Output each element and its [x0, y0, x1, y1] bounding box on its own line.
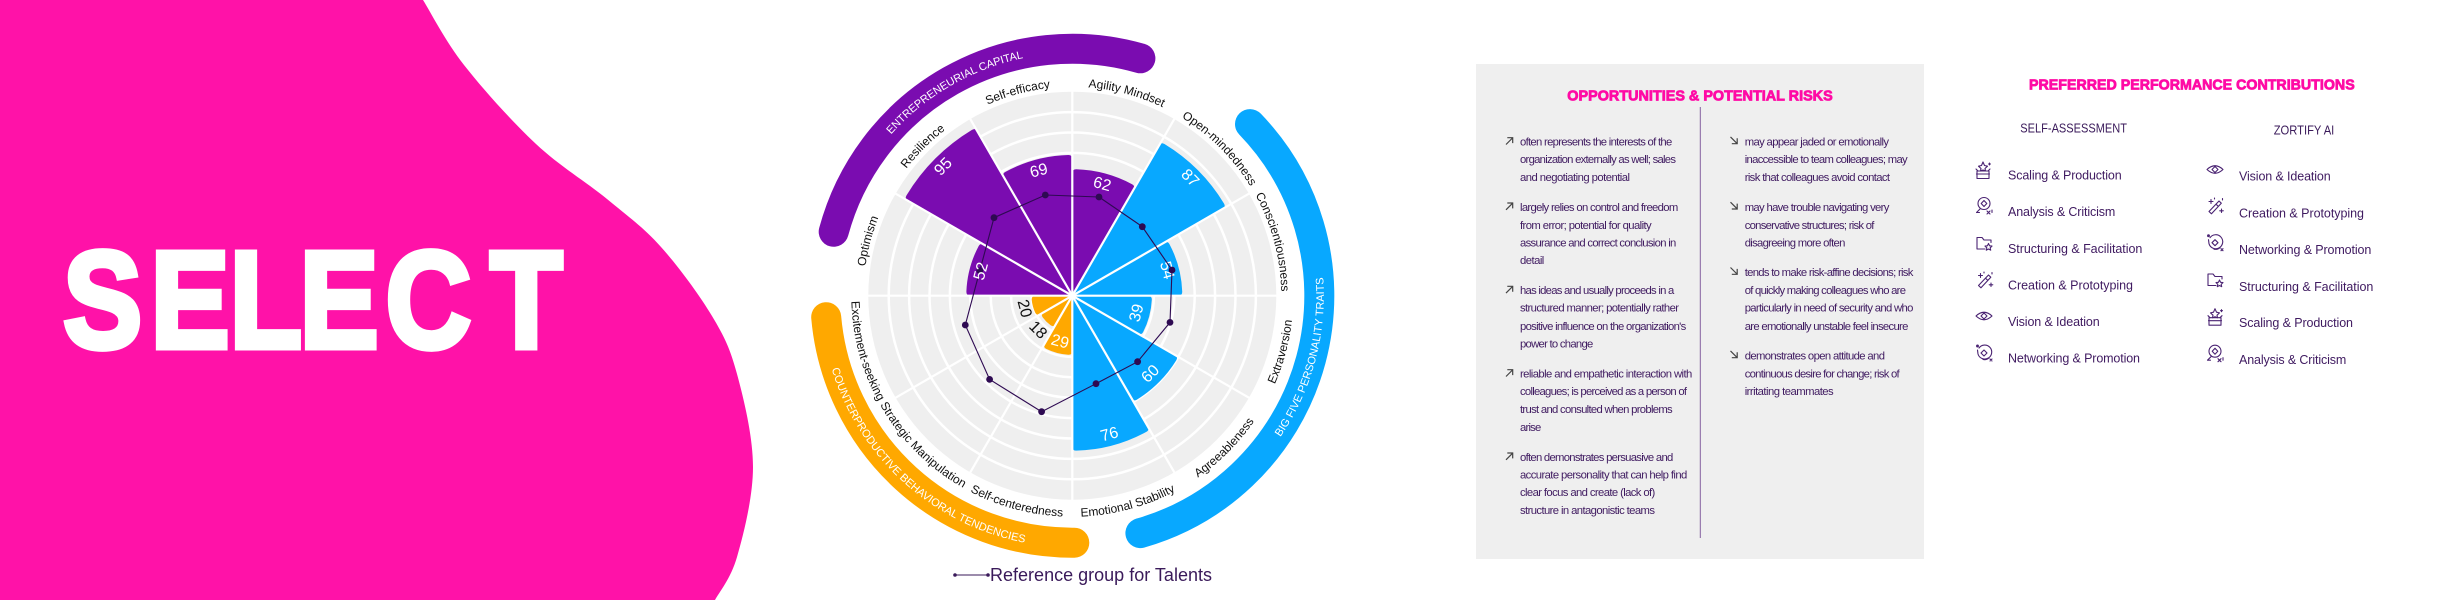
risk 2: conservative structures; risk of	[1745, 220, 1875, 232]
category labels: Agility Mindset	[1088, 80, 1166, 108]
item: networking and promotion: Networking & Promotion	[2008, 352, 2140, 366]
title: SELECT: SELECT	[63, 223, 563, 378]
opportunity 5	[1506, 452, 1687, 517]
item: structuring and facilitation	[2208, 274, 2373, 294]
value labels: 39	[1127, 302, 1148, 324]
risk 3: particularly in need of security and who	[1745, 302, 1913, 314]
value labels: 87	[1177, 166, 1202, 191]
bars	[904, 116, 1237, 468]
item: networking and promotion	[1977, 345, 2140, 366]
opportunity 5: clear focus and create (lack of)	[1520, 487, 1656, 499]
category labels: Resilience	[900, 126, 944, 168]
item: structuring and facilitation	[1977, 238, 2142, 256]
item: scaling and production: Scaling & Production	[2008, 168, 2122, 182]
item: networking and promotion: Networking & Promotion	[2239, 243, 2371, 257]
risk 1: inaccessible to team colleagues; may	[1745, 154, 1908, 166]
opportunity 3: power to change	[1520, 338, 1593, 350]
item: creation and prototyping	[2209, 198, 2364, 220]
opportunity 4: colleagues; is perceived as a person of	[1520, 386, 1688, 398]
item: creation and prototyping: Creation & Prototyping	[2008, 278, 2133, 292]
opportunity 4: reliable and empathetic interaction with	[1520, 368, 1692, 380]
opportunity 5: structure in antagonistic teams	[1520, 505, 1655, 517]
band: big five personality traits	[1125, 109, 1334, 548]
chart grid	[868, 92, 1276, 500]
opportunity 1: organization externally as well; sales	[1520, 154, 1676, 166]
opportunity 5: often demonstrates persuasive and	[1520, 452, 1673, 464]
risk 4: demonstrates open attitude and	[1745, 350, 1885, 362]
opportunity 2: assurance and correct conclusion in	[1520, 238, 1676, 250]
pink background shape	[0, 0, 753, 600]
item: vision and ideation: Vision & Ideation	[2008, 315, 2100, 329]
value labels	[931, 155, 1202, 445]
panel: opportunities and potential risks	[1476, 64, 1924, 559]
item: vision and ideation	[1976, 312, 2100, 329]
risk 2	[1730, 202, 1890, 250]
opportunity 4	[1506, 368, 1692, 434]
column heading: ZORTIFY AI	[2274, 123, 2334, 138]
column heading: SELF-ASSESSMENT	[2020, 121, 2127, 136]
opportunity 3: positive influence on the organization's	[1520, 321, 1687, 333]
reference group line	[962, 192, 1175, 415]
risk 2: disagreeing more often	[1745, 238, 1845, 250]
category labels: Extraversion	[1268, 320, 1292, 384]
risk 3: of quickly making colleagues who are	[1745, 285, 1906, 297]
column divider	[1699, 107, 1701, 538]
item: creation and prototyping	[1978, 272, 2133, 292]
opportunity 1	[1506, 136, 1676, 184]
value labels: 20	[1013, 298, 1035, 320]
category labels: Optimism	[858, 216, 878, 266]
category labels: Strategic Manipulation	[881, 402, 966, 488]
category labels: Emotional Stability	[1081, 486, 1174, 517]
item: networking and promotion	[2208, 235, 2371, 257]
category labels: Conscientiousness	[1256, 192, 1288, 291]
value labels: 62	[1091, 174, 1113, 195]
value labels: 69	[1028, 161, 1050, 182]
value labels: 29	[1049, 332, 1071, 353]
value 52: 52	[971, 260, 992, 282]
item: structuring and facilitation: Structuring & Facilitation	[2008, 242, 2142, 256]
item: vision and ideation: Vision & Ideation	[2239, 170, 2331, 184]
risk 4: irritating teammates	[1745, 386, 1834, 398]
opportunity 2: largely relies on control and freedom	[1520, 202, 1678, 214]
category labels: Self-centeredness	[971, 485, 1063, 516]
value labels: 60	[1138, 362, 1163, 386]
risk 4: continuous desire for change; risk of	[1745, 368, 1901, 380]
band: entrepreneurial capital: ENTREPRENEURIAL CAPITAL	[886, 52, 1023, 134]
opportunity 5: accurate personality that can help find	[1520, 470, 1687, 482]
value labels: 95	[931, 155, 956, 179]
item: scaling and production: Scaling & Production	[2239, 316, 2353, 330]
opportunity 2: from error; potential for quality	[1520, 220, 1652, 232]
category labels: Open-mindedness	[1184, 112, 1255, 186]
column: zortify ai	[2207, 123, 2373, 367]
opportunity 3: has ideas and usually proceeds in a	[1520, 285, 1675, 297]
value labels: 18	[1025, 318, 1050, 343]
opportunity 1: often represents the interests of the	[1520, 136, 1672, 148]
value labels: 54	[1156, 260, 1177, 281]
item: analysis and criticism: Analysis & Criticism	[2239, 353, 2346, 367]
opportunity 3: structured manner; potentially rather	[1520, 302, 1679, 314]
legend: reference group for talents: Reference group for Talents	[990, 565, 1212, 585]
item: analysis and criticism	[2208, 345, 2346, 367]
category labels: Agreeableness	[1196, 418, 1254, 478]
category labels: Excitement-seeking	[851, 302, 884, 402]
band: entrepreneurial capital	[818, 34, 1156, 247]
item: vision and ideation	[2207, 166, 2331, 184]
panel heading: OPPORTUNITIES & POTENTIAL RISKS	[1567, 88, 1833, 105]
band: counterproductive behavioral tendencies	[811, 302, 1090, 558]
item: creation and prototyping: Creation & Prototyping	[2239, 206, 2364, 220]
item: structuring and facilitation: Structuring & Facilitation	[2239, 280, 2373, 294]
band: big five personality traits: BIG FIVE PERSONALITY TRAITS	[1274, 278, 1324, 436]
category labels: Self-efficacy	[986, 82, 1050, 104]
risk 1	[1730, 136, 1908, 184]
risk 3: are emotionally unstable feel insecure	[1745, 321, 1908, 333]
item: analysis and criticism: Analysis & Criticism	[2008, 205, 2115, 219]
risk 2: may have trouble navigating very	[1745, 202, 1890, 214]
opportunity 1: and negotiating potential	[1520, 172, 1630, 184]
risk 1: may appear jaded or emotionally	[1745, 136, 1889, 148]
risk 3	[1730, 267, 1914, 333]
risk 4	[1730, 350, 1901, 398]
category labels	[851, 80, 1292, 517]
risk 1: risk that colleagues avoid contact	[1745, 172, 1891, 184]
opportunity 4: arise	[1520, 422, 1541, 434]
column: self-assessment	[1976, 121, 2142, 366]
item: scaling and production	[2208, 309, 2353, 330]
item: scaling and production	[1976, 162, 2122, 182]
risk 3: tends to make risk-affine decisions; risk	[1745, 267, 1914, 279]
band: counterproductive behavioral tendencies: COUNTERPRODUCTIVE BEHAVIORAL TENDENCIES	[832, 368, 1026, 542]
opportunity 3	[1506, 285, 1687, 350]
radial chart	[811, 34, 1334, 558]
opportunity 4: trust and consulted when problems	[1520, 404, 1673, 416]
item: analysis and criticism	[1976, 198, 2115, 219]
heading: preferred performance contributions: PREFERRED PERFORMANCE CONTRIBUTIONS	[2029, 77, 2355, 94]
spokes	[867, 91, 1277, 501]
opportunity 2: detail	[1520, 255, 1544, 267]
value labels: 76	[1099, 424, 1120, 445]
opportunity 2	[1506, 202, 1678, 267]
